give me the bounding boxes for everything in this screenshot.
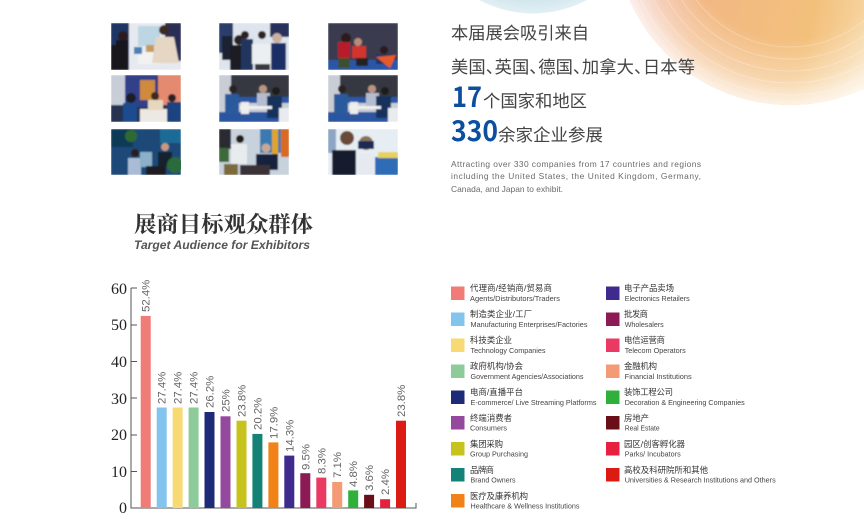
legend item: healthcare: 医疗及康养机构 (470, 491, 528, 501)
legend item: wholesalers: 批发商 (624, 309, 648, 319)
text: English summary: Attracting over 330 companies from 17 countries and regions (451, 159, 701, 169)
value labels: 23.8% (396, 385, 408, 417)
legend item: e-commerce (451, 387, 597, 407)
legend item: e-commerce: 电商/直播平台 (470, 387, 523, 397)
photo: visitors among plants (111, 129, 183, 175)
photo: meeting at table (219, 75, 289, 122)
value labels: 20.2% (252, 398, 264, 430)
chart axes: 20 (111, 427, 127, 444)
legend item: technology: 科技类企业 (470, 335, 512, 345)
heading: chart title (134, 212, 314, 252)
value labels: 27.4% (173, 372, 185, 404)
legend item: consumers: 终端消费者 (470, 413, 512, 423)
legend item: technology (451, 335, 546, 355)
legend item: financial (606, 361, 692, 381)
heading: exhibitor summary (451, 23, 695, 150)
legend item: telecom: Telecom Operators (625, 346, 686, 355)
text: 17 countries: 个国家和地区 (483, 91, 587, 111)
legend item: financial: Financial Institutions (625, 372, 692, 381)
legend item: government: 政府机构/协会 (470, 361, 524, 371)
value labels: 2.4% (380, 469, 392, 495)
legend item: wholesalers (606, 309, 664, 329)
legend item: brand owners: Brand Owners (470, 476, 516, 484)
heading: chart title: 展商目标观众群体 (134, 212, 314, 237)
legend item: parks: 园区/创客孵化器 (624, 439, 686, 449)
legend item: brand owners (451, 465, 516, 484)
bar chart (111, 280, 416, 517)
value labels: 17.9% (268, 407, 280, 439)
legend item: healthcare (451, 491, 580, 510)
chart axes: 30 (111, 391, 127, 408)
value labels: 52.4% (141, 280, 153, 312)
decorative circle: orange top right (615, 0, 864, 105)
legend item: real estate: Real Estate (625, 424, 660, 432)
value labels: 26.2% (204, 376, 216, 408)
value labels: 27.4% (157, 372, 169, 404)
photo: meeting at table (repeat) (328, 75, 398, 122)
legend item: consumers: Consumers (470, 424, 507, 432)
value labels: 9.5% (300, 444, 312, 470)
value labels: 23.8% (236, 385, 248, 417)
legend item: universities (606, 465, 776, 484)
text: line 2: 美国、英国、德国、加拿大、日本等 (451, 57, 695, 77)
legend item: group purchasing: 集团采购 (470, 439, 503, 449)
legend item: government: Government Agencies/Associations (470, 372, 584, 381)
legend item: healthcare: Healthcare & Wellness Institutions (470, 502, 580, 510)
legend item: parks (606, 439, 686, 458)
legend item: real estate: 房地产 (624, 413, 649, 423)
legend item: technology: Technology Companies (470, 346, 546, 355)
legend item: telecom (606, 335, 686, 355)
legend item: agents: 代理商/经销商/贸易商 (470, 283, 552, 293)
photo: booth conversation (111, 23, 181, 70)
value labels (141, 280, 408, 495)
value labels: 4.8% (348, 461, 360, 487)
legend item: wholesalers: Wholesalers (625, 320, 664, 329)
chart axes: 60 (111, 281, 127, 298)
text: English summary: Canada, and Japan to exhibit. (451, 184, 563, 194)
legend item: agents (451, 283, 560, 303)
legend item: manufacturing: Manufacturing Enterprises/Factories (470, 320, 588, 329)
text: English summary: including the United States, the United Kingdom, Germany, (451, 171, 701, 181)
legend item: electronics: 电子产品卖场 (624, 283, 674, 293)
text: 330 companies (451, 110, 603, 150)
legend item: decoration (606, 387, 745, 407)
heading: chart title: Target Audience for Exhibitors (134, 238, 310, 252)
photo: group standing (219, 23, 289, 70)
legend item: telecom: 电信运营商 (624, 335, 665, 345)
photo grid (111, 23, 398, 175)
bars (141, 316, 406, 508)
decorative circle: teal top (418, 0, 648, 14)
legend item: group purchasing (451, 439, 528, 458)
chart axes: 40 (111, 354, 127, 371)
chart axes: 50 (111, 317, 127, 334)
legend item: financial: 金融机构 (624, 361, 657, 371)
legend item: electronics (606, 283, 690, 303)
text: line 1: 本届展会吸引来自 (451, 23, 589, 43)
legend item: decoration: 装饰工程公司 (624, 387, 673, 397)
legend item: government (451, 361, 584, 381)
photo: seated man with visitor (219, 129, 289, 175)
legend item: universities: 高校及科研院所和其他 (624, 465, 709, 475)
legend item: manufacturing: 制造类企业/工厂 (470, 309, 532, 319)
chart axes: 0 (119, 500, 127, 517)
legend item: consumers (451, 413, 512, 432)
value labels: 7.1% (332, 452, 344, 478)
photo: red shirts seated (328, 23, 398, 70)
chart axes: 10 (111, 464, 127, 481)
text: 17 countries (452, 76, 587, 116)
value labels: 3.6% (364, 465, 376, 491)
photo: child with VR headset (328, 129, 398, 175)
value labels: 14.3% (284, 420, 296, 452)
legend item: real estate (606, 413, 660, 432)
legend item: manufacturing (451, 309, 588, 329)
value labels: 8.3% (316, 448, 328, 474)
text: English summary (451, 159, 701, 194)
legend item: brand owners: 品牌商 (470, 465, 494, 475)
value labels: 25% (220, 389, 232, 412)
photo: product table (111, 75, 181, 122)
text: 330 companies: 330 (451, 110, 498, 150)
legend item: group purchasing: Group Purchasing (470, 450, 528, 458)
value labels: 27.4% (189, 372, 201, 404)
legend item: agents: Agents/Distributors/Traders (470, 294, 560, 303)
legend item: e-commerce: E-commerce/ Live Streaming Platforms (470, 398, 597, 407)
chart axes (111, 281, 416, 517)
legend item: electronics: Electronics Retailers (625, 294, 690, 303)
text: 17 countries: 17 (452, 76, 482, 116)
legend (451, 283, 776, 510)
text: 330 companies: 余家企业参展 (498, 125, 603, 145)
legend item: decoration: Decoration & Engineering Companies (625, 398, 745, 407)
legend item: universities: Universities & Research Institutions and Others (625, 476, 776, 484)
legend item: parks: Parks/ Incubators (625, 450, 681, 458)
